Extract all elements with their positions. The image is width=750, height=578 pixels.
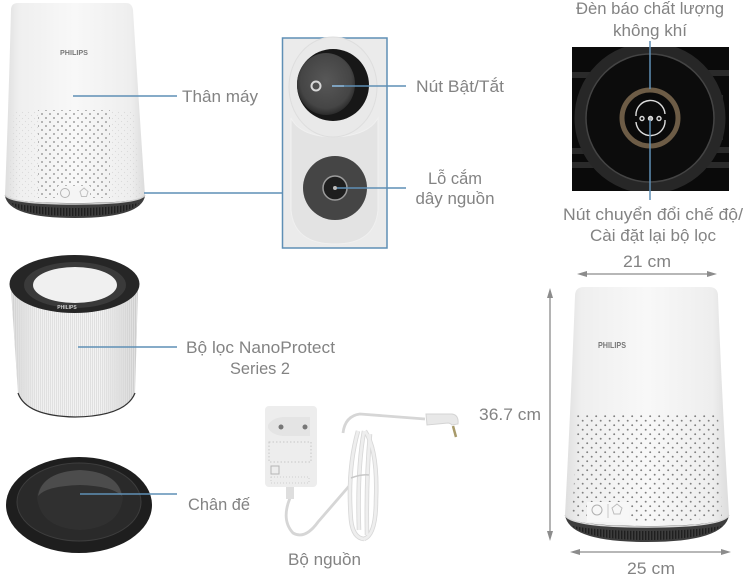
arrow: height 36.7 cm [547, 288, 553, 541]
label: 25 cm: 25 cm [627, 559, 675, 578]
label: Nút chuyển đổi chế độ / Cài đặt lại bộ lọc: Cài đặt lại bộ lọc [590, 226, 716, 245]
purifier dimensions view (right) [565, 287, 729, 542]
brand label on filter ring: PHILIPS [57, 305, 77, 311]
purifier main body (left) [5, 3, 145, 218]
leader: switch [332, 85, 406, 87]
label: Lỗ cắm dây nguồn: dây nguồn [416, 189, 494, 208]
arrow: width 21 cm [577, 271, 717, 277]
leader: filter [78, 346, 177, 348]
label: Bộ lọc NanoProtect Series 2: Bộ lọc NanoProtect [186, 338, 335, 357]
leader: base to panel [144, 192, 282, 194]
label: Thân máy: Thân máy [182, 87, 258, 106]
filter NanoProtect [10, 255, 140, 417]
icon: rocker switch [297, 49, 369, 121]
label: Nút Bật/Tắt: Nút Bật/Tắt [416, 77, 504, 96]
label: Chân đế: Chân đế [188, 495, 251, 514]
icon: mode button [636, 100, 665, 136]
arrow: width 25 cm [570, 549, 731, 555]
leader: mode button [649, 120, 651, 200]
label: Bộ lọc NanoProtect Series 2 [186, 338, 335, 378]
label: Bộ nguồn: Bộ nguồn [288, 550, 361, 569]
icon: power socket [303, 156, 367, 220]
brand label left: PHILIPS [60, 48, 88, 57]
photo: control panel close-up [572, 47, 729, 191]
label: 36.7 cm: 36.7 cm [479, 405, 541, 424]
label: Đèn báo chất lượng không khí: không khí [613, 21, 687, 40]
panel: switch and power socket [282, 37, 387, 248]
label: Lỗ cắm dây nguồn: Lỗ cắm [428, 169, 482, 188]
brand label right: PHILIPS [598, 340, 626, 350]
label: 21 cm: 21 cm [623, 252, 671, 271]
label: Bộ lọc NanoProtect Series 2: Series 2 [230, 359, 290, 378]
label: Đèn báo chất lượng không khí [576, 0, 724, 40]
power adapter with cable [265, 406, 458, 539]
leader: base plate [80, 493, 177, 495]
label: Nút chuyển đổi chế độ / Cài đặt lại bộ lọc: Nút chuyển đổi chế độ/ [563, 205, 743, 224]
leader: air quality indicator [649, 41, 651, 89]
leader: body [73, 95, 177, 97]
label: Lỗ cắm dây nguồn [416, 169, 494, 208]
leader: socket [337, 187, 406, 189]
base plate [6, 457, 152, 553]
label: Nút chuyển đổi chế độ / Cài đặt lại bộ lọc [563, 205, 743, 245]
